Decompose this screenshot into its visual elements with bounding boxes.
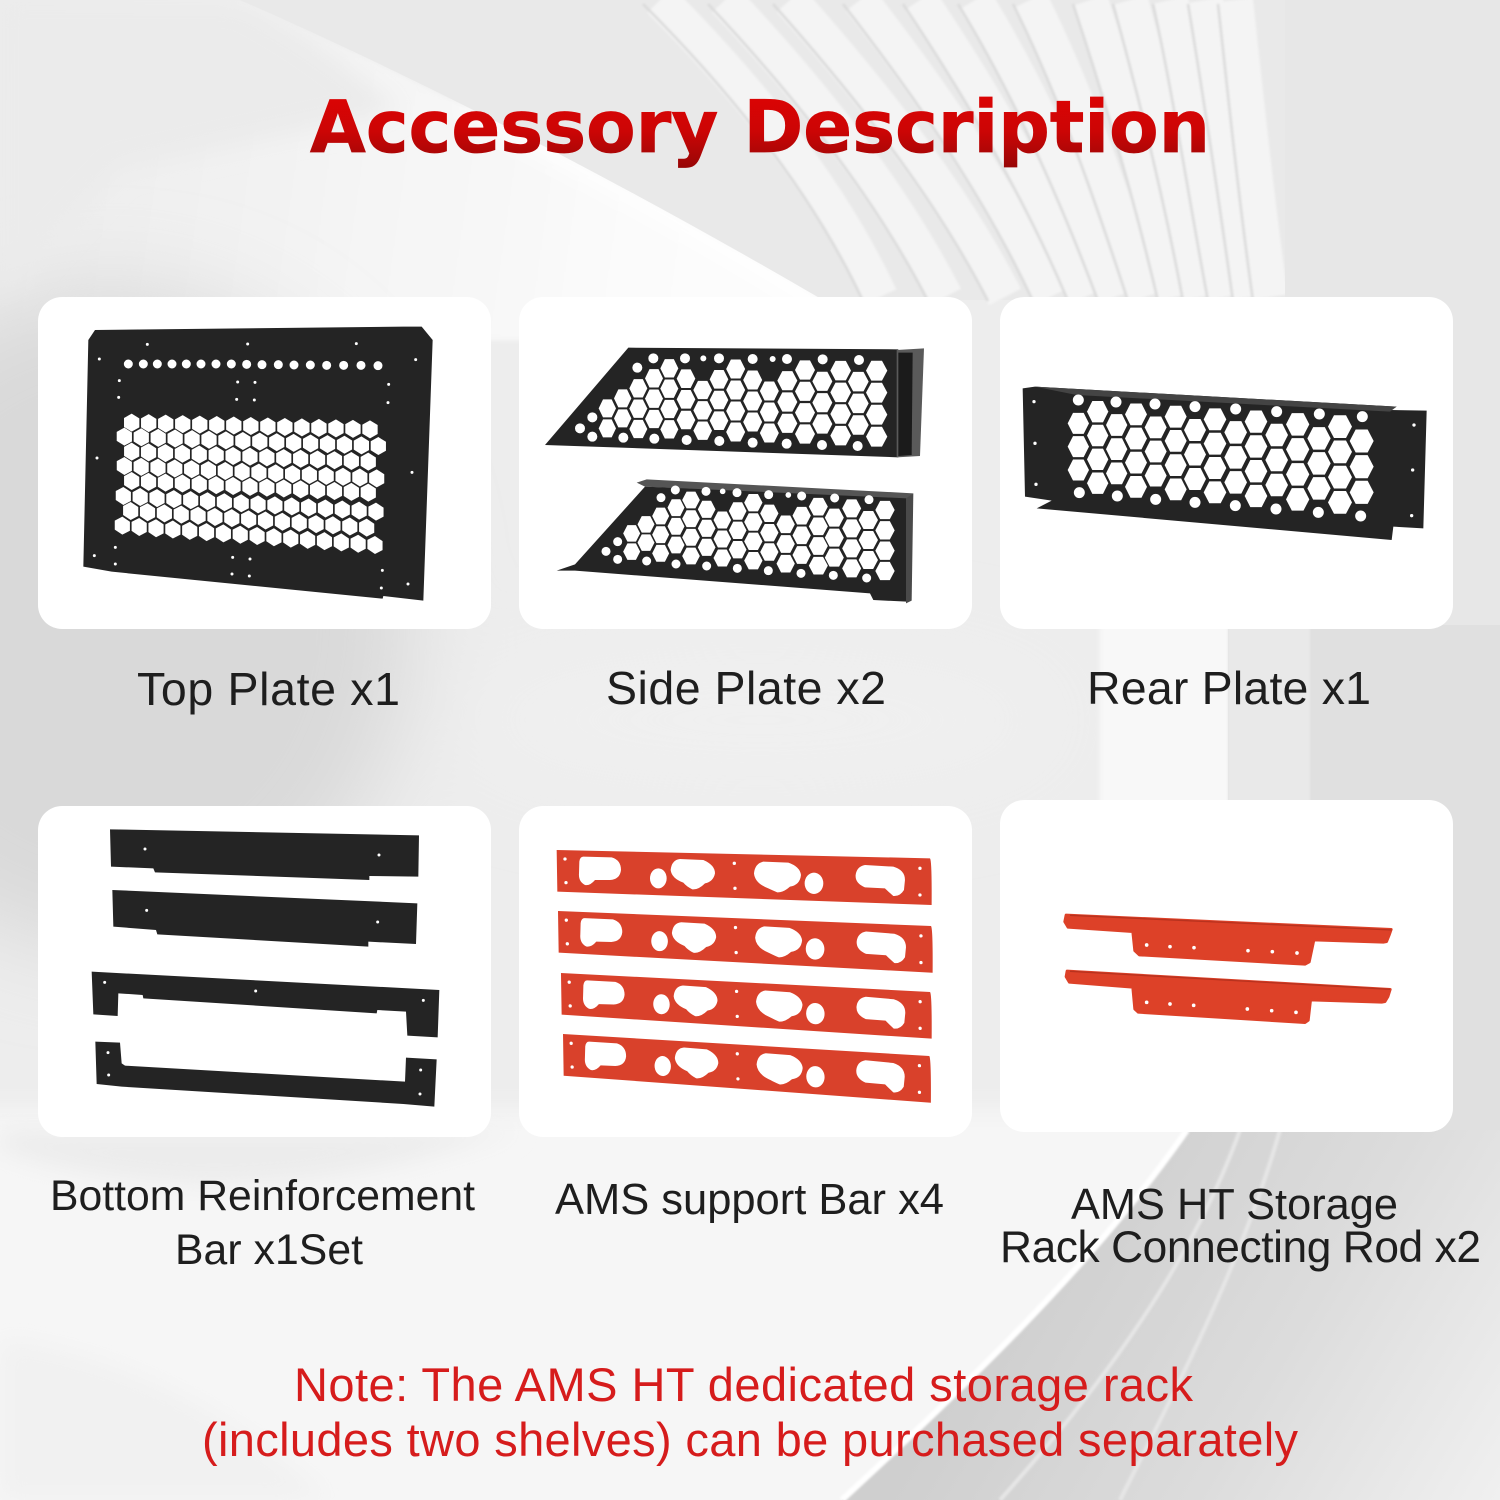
title: Accessory Description [310,85,1210,169]
image: black top plate with hexagon mesh [83,327,433,601]
panel: top plate [38,297,491,715]
label: AMS support bar: AMS support Bar x4 [555,1176,944,1224]
card: side plate [519,297,972,629]
label: connecting rod: AMS HT Storage [1071,1181,1398,1229]
label: rear plate: Rear Plate x1 [1087,662,1371,714]
image: black rear plate with hexagon mesh [1023,387,1427,540]
label: bottom reinforcement bar [50,1172,475,1274]
panel: AMS support bar [519,806,972,1224]
card: bottom reinforcement bar [38,806,491,1137]
lower side plate [557,479,913,603]
panel: rear plate [1000,297,1453,714]
upper side plate [545,348,924,457]
image: two black side plates with hexagon mesh [545,348,924,603]
label: top plate: Top Plate x1 [137,663,400,715]
label: connecting rod: Rack Connecting Rod x2 [1000,1223,1481,1272]
note: Note: The AMS HT dedicated storage rack [294,1358,1194,1411]
label: bottom reinforcement bar: Bottom Reinforcement [50,1172,475,1220]
card: connecting rod [1000,800,1453,1132]
label: connecting rod [1000,1181,1481,1272]
panel: AMS HT storage rack connecting rod [1000,800,1481,1272]
label: side plate: Side Plate x2 [606,662,886,714]
card: top plate [38,297,491,629]
card: AMS support bar [519,806,972,1137]
panel: side plate [519,297,972,714]
card: rear plate [1000,297,1453,629]
image: four black reinforcement bars [92,829,439,1107]
image: two red connecting rods [1065,915,1392,1023]
note: (includes two shelves) can be purchased separately [202,1413,1298,1466]
note [202,1358,1298,1466]
panel: bottom reinforcement bar [38,806,491,1274]
image: four red AMS support bars [557,850,933,1103]
label: bottom reinforcement bar: Bar x1Set [175,1226,363,1274]
